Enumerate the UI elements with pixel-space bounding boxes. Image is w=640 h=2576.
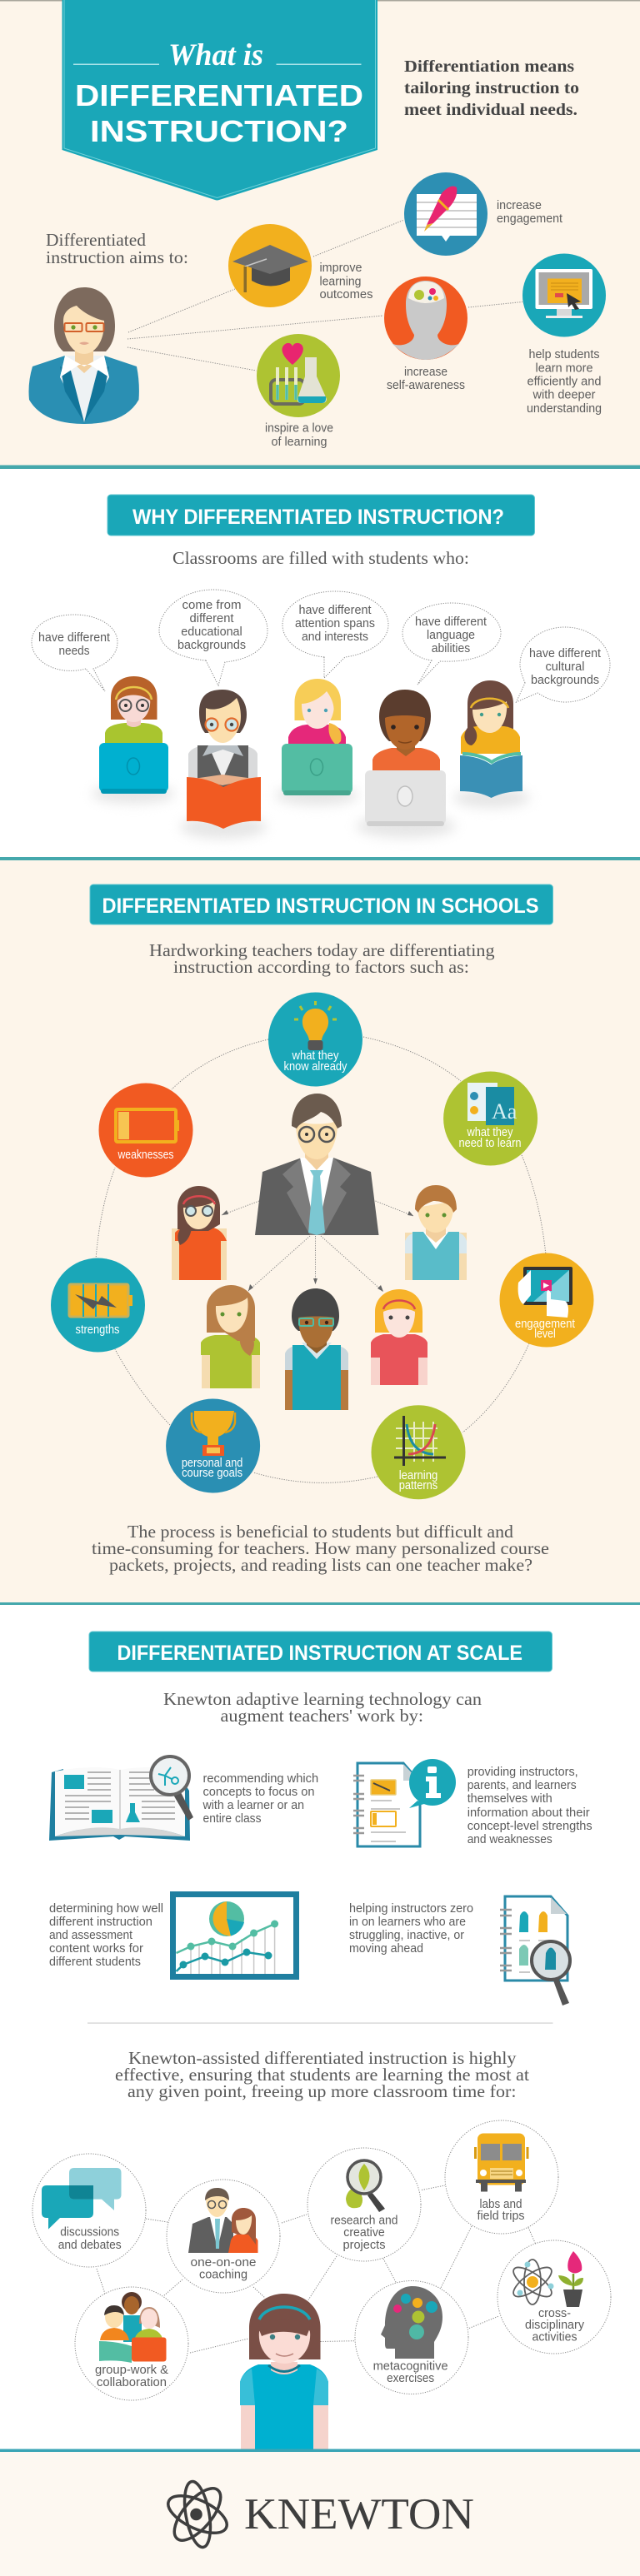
speech bubble: attention spans: attention spans	[295, 616, 375, 630]
student 1: blue laptop	[92, 676, 175, 804]
closing paragraph: The process is beneficial to students but difficult and	[128, 1522, 514, 1542]
speech bubble: language abilities	[402, 603, 501, 685]
activity: cross-disciplinary activities	[498, 2240, 611, 2354]
activity: research and creative projects: creative	[343, 2225, 385, 2240]
speech bubble: attention spans: and interests	[302, 630, 368, 644]
icon: chart with pie	[173, 1894, 297, 1977]
definition text: tailoring instruction to	[404, 79, 579, 97]
speech bubble: educational backgrounds: different	[190, 611, 234, 625]
text: providing instructors: providing instructors,	[468, 1765, 578, 1779]
text: recommending concepts: entire class	[203, 1811, 262, 1826]
text: helping instructors	[349, 1901, 473, 1956]
activity: research and creative projects: projects	[343, 2238, 385, 2252]
activity: one-on-one coaching	[167, 2180, 280, 2293]
aim: improve learning outcomes: improve	[320, 261, 362, 275]
title banner	[62, 0, 378, 200]
speech bubble: needs: needs	[58, 644, 90, 658]
factor: engagement level: engagement	[515, 1318, 575, 1331]
factor: what they know already: what they	[292, 1049, 339, 1063]
outro text: effective, ensuring that students are learning the most at	[115, 2065, 529, 2085]
aim: help students learn: efficiently and	[527, 375, 602, 388]
teacher portrait	[28, 287, 139, 424]
activity: labs and field trips	[445, 2120, 558, 2234]
aim: increase engagement	[404, 172, 563, 256]
student 2: orange book	[180, 690, 267, 839]
factor: what they need to learn: need to learn	[458, 1137, 522, 1150]
text: recommending concepts	[202, 1771, 318, 1826]
speech bubble: needs	[32, 615, 118, 691]
factor: what they need to learn: what they	[467, 1126, 513, 1139]
speech bubble: language abilities: language	[427, 628, 475, 642]
speech bubble: language abilities: abilities	[432, 641, 470, 655]
icon: open book with magnifier	[49, 1756, 193, 1841]
aim: help students learn: with deeper	[532, 388, 595, 401]
central student girl	[240, 2294, 328, 2449]
aim: increase self-awareness: self-awareness	[387, 378, 465, 392]
section divider	[0, 2449, 640, 2452]
aim: improve learning outcomes: outcomes	[320, 287, 373, 301]
aim: increase engagement: increase	[497, 198, 542, 212]
text: providing instructors: and weaknesses	[468, 1832, 552, 1846]
factor: strengths: strengths	[75, 1323, 120, 1337]
definition text: meet individual needs.	[404, 101, 578, 119]
factor: learning patterns: patterns	[399, 1479, 438, 1492]
icon: notebook with magnifier	[500, 1896, 570, 2005]
activity: group-work and collaboration	[75, 2287, 188, 2400]
text: providing instructors: concept-level strengths	[468, 1819, 592, 1833]
aim: inspire a love of learning: inspire a love	[265, 421, 333, 435]
factor: strengths	[51, 1258, 145, 1353]
speech bubble: educational backgrounds	[159, 590, 268, 685]
section heading: DIFFERENTIATED INSTRUCTION IN SCHOOLS	[102, 894, 538, 918]
factor: learning patterns: learning	[399, 1469, 438, 1482]
factor: weaknesses: weaknesses	[118, 1148, 173, 1162]
text: determining how well: content works for	[49, 1941, 143, 1956]
speech bubble: cultural backgrounds: backgrounds	[531, 673, 599, 687]
icon: notebook with info bubble	[353, 1759, 456, 1846]
closing paragraph: packets, projects, and reading lists can one teacher make?	[109, 1555, 532, 1575]
text: providing instructors	[468, 1765, 592, 1846]
speech bubble: educational backgrounds: backgrounds	[178, 638, 246, 652]
factor: personal and course goals: personal and	[182, 1457, 242, 1470]
activity: metacognitive exercises	[355, 2280, 468, 2394]
activity: group-work and collaboration: group-work &	[95, 2363, 168, 2377]
section heading: DIFFERENTIATED INSTRUCTION AT SCALE	[117, 1642, 522, 1665]
activity: discussions and debates: discussions	[60, 2225, 119, 2239]
dotted network connectors	[97, 2185, 535, 2353]
intro text: Classrooms are filled with students who:	[172, 548, 469, 568]
section heading	[108, 495, 535, 536]
text: helping instructors: moving ahead	[349, 1941, 423, 1956]
activity: research and creative projects	[308, 2148, 421, 2261]
factor: what they need to learn: Aa	[492, 1099, 518, 1124]
speech bubble: cultural backgrounds: have different	[529, 646, 602, 660]
Knewton logo	[162, 2479, 474, 2549]
student 5: blue book	[453, 680, 530, 808]
speech bubble: educational backgrounds: come from	[182, 598, 242, 612]
definition text: Differentiation means	[404, 57, 574, 76]
intro text: Hardworking teachers today are differentiating	[149, 940, 495, 960]
aims intro text	[46, 230, 188, 267]
activity: metacognitive exercises: exercises	[387, 2371, 434, 2385]
student: girl in orange	[172, 1186, 227, 1280]
panel: differentiated instruction at scale	[0, 1605, 640, 2449]
speech bubble: attention spans	[282, 591, 388, 678]
aim: increase engagement: engagement	[497, 212, 563, 226]
student 4: grey laptop	[356, 690, 456, 838]
aim: improve learning outcomes	[228, 224, 373, 307]
aim: help students learn: learn more	[535, 361, 593, 375]
speech bubble: needs: have different	[38, 630, 111, 645]
text: determining how well: different students	[49, 1955, 141, 1969]
section heading: WHY DIFFERENTIATED INSTRUCTION?	[132, 506, 504, 529]
text: determining how well: different instruction	[49, 1915, 152, 1929]
student: boy in blue vest	[405, 1185, 467, 1280]
section divider	[0, 1602, 640, 1605]
activity: discussions and debates: and debates	[58, 2238, 122, 2252]
ring of dotted connectors	[96, 1037, 546, 1482]
definition text	[404, 57, 579, 119]
activity: group-work and collaboration: collaboration	[97, 2375, 167, 2389]
aim: inspire a love of learning: of learning	[272, 435, 327, 449]
title banner: What is	[168, 38, 263, 72]
closing paragraph	[92, 1522, 549, 1575]
closing paragraph: time-consuming for teachers. How many personalized course	[92, 1538, 549, 1558]
factor: personal and course goals	[166, 1399, 260, 1492]
title banner: DIFFERENTIATED	[75, 78, 363, 112]
activity: cross-disciplinary activities: disciplinary	[525, 2318, 584, 2332]
activity: research and creative projects: research and	[330, 2214, 398, 2227]
factor: personal and course goals: course goals	[182, 1467, 242, 1480]
student: boy with glasses in teal vest	[285, 1288, 348, 1410]
intro text: Knewton adaptive learning technology can	[163, 1689, 482, 1709]
text: providing instructors: themselves with	[468, 1791, 552, 1806]
aim: help students learn: understanding	[527, 401, 602, 416]
factor: what they know already	[268, 993, 362, 1086]
factor: learning patterns	[372, 1405, 465, 1499]
text: providing instructors: information about their	[468, 1806, 590, 1820]
panel: why differentiated instruction	[0, 469, 640, 857]
arrows from teacher to students	[222, 1201, 413, 1292]
text: providing instructors: parents, and learners	[468, 1778, 577, 1792]
activity: discussions and debates	[32, 2154, 146, 2267]
intro text: instruction according to factors such as:	[173, 957, 469, 977]
factor: engagement level: level	[534, 1328, 556, 1341]
aim: increase self-awareness: increase	[404, 365, 448, 379]
text: determining how well: determining how well	[49, 1901, 163, 1916]
divider rule	[88, 2022, 553, 2024]
aim: help students learn	[522, 253, 606, 416]
intro text: augment teachers' work by:	[220, 1706, 423, 1726]
title banner: INSTRUCTION?	[90, 114, 348, 148]
student 3: green laptop	[275, 679, 358, 805]
atom mark	[162, 2479, 232, 2549]
panel: what is differentiated instruction	[0, 0, 640, 466]
intro text	[163, 1689, 482, 1726]
text: recommending concepts: with a learner or an	[202, 1798, 304, 1812]
activity: metacognitive exercises: metacognitive	[373, 2359, 448, 2374]
aim: increase self-awareness	[384, 277, 468, 392]
section divider	[0, 465, 640, 469]
Knewton logo: KNEWTON	[244, 2490, 474, 2539]
activity: labs and field trips: labs and	[480, 2197, 522, 2211]
activity: cross-disciplinary activities: activities	[532, 2330, 577, 2344]
aims intro text: Differentiated	[46, 230, 147, 250]
activity: labs and field trips: field trips	[477, 2209, 525, 2223]
dotted connectors	[128, 220, 522, 371]
text: recommending concepts: recommending which	[203, 1771, 318, 1786]
speech bubble: attention spans: have different	[298, 603, 372, 617]
outro text: any given point, freeing up more classroom time for:	[128, 2081, 517, 2101]
speech bubble: educational backgrounds: educational	[181, 625, 242, 639]
factor: what they know already: know already	[283, 1060, 348, 1074]
aim: inspire a love of learning	[257, 334, 340, 449]
factor: what they need to learn	[443, 1071, 538, 1166]
panel: footer	[0, 2452, 640, 2576]
text: recommending concepts: concepts to focus on	[203, 1785, 315, 1799]
speech bubble: cultural backgrounds: cultural	[545, 660, 585, 674]
speech bubble: language abilities: have different	[415, 615, 488, 629]
aims intro text: instruction aims to:	[46, 247, 188, 267]
student: girl in red	[371, 1289, 428, 1385]
panel: differentiated instruction in schools	[0, 860, 640, 1602]
factor: weaknesses	[98, 1083, 193, 1178]
male teacher	[255, 1094, 378, 1235]
section divider	[0, 857, 640, 860]
activity: one-on-one coaching: coaching	[199, 2268, 248, 2282]
section heading	[90, 884, 553, 924]
outro text: Knewton-assisted differentiated instruction is highly	[128, 2048, 517, 2068]
text: determining how well: and assessment	[49, 1928, 133, 1942]
text: helping instructors: helping instructors zero	[349, 1901, 473, 1916]
student: girl in green	[201, 1285, 260, 1388]
factor: engagement level	[500, 1253, 593, 1348]
outro text	[115, 2048, 529, 2101]
aim: improve learning outcomes: learning	[320, 275, 362, 288]
speech bubble: cultural backgrounds	[517, 627, 610, 702]
text: helping instructors: struggling, inactive, or	[349, 1928, 464, 1942]
aim: help students learn: help students	[528, 347, 600, 361]
text: helping instructors: in on learners who are	[349, 1915, 466, 1929]
activity: one-on-one coaching: one-on-one	[190, 2255, 257, 2270]
intro text	[149, 940, 495, 977]
activity: cross-disciplinary activities: cross-	[538, 2306, 571, 2320]
text: determining how well	[49, 1901, 163, 1969]
section heading	[89, 1632, 552, 1672]
